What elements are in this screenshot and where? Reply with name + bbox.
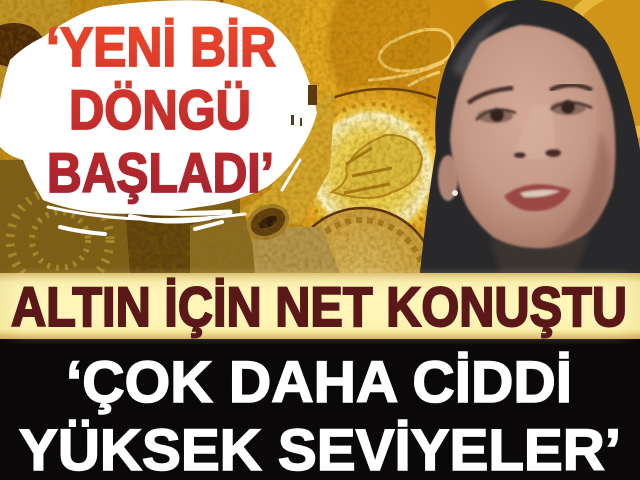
brush stroke details xyxy=(45,160,300,234)
photo background: gold coins xyxy=(0,0,640,273)
mouth xyxy=(504,184,571,211)
nose xyxy=(514,105,561,159)
left eyebrow xyxy=(468,88,513,103)
coin: dark ornate coin, lower left xyxy=(0,160,240,273)
coin: top centre fragment xyxy=(220,0,308,64)
white brush blob xyxy=(0,0,317,234)
hair shine xyxy=(452,15,504,78)
face xyxy=(450,25,616,248)
gold wedge right of blob xyxy=(235,90,335,225)
brush rough marks xyxy=(291,85,317,126)
right eyebrow xyxy=(550,85,592,90)
headline inside blob xyxy=(46,15,276,204)
gold ring xyxy=(246,204,290,240)
neck shadow xyxy=(490,235,590,273)
coin: lower ornate coin xyxy=(310,206,424,273)
coin: large portrait coin at top xyxy=(300,0,516,104)
quote line 1: ‘ÇOK DAHA CİDDİ xyxy=(66,350,572,415)
ear xyxy=(438,155,458,201)
black lower panel xyxy=(0,339,640,480)
coin: dark band centre bottom xyxy=(190,215,260,273)
shadow under cheek xyxy=(554,134,610,248)
headline line 3: BAŞLADI’ xyxy=(47,141,274,204)
earring xyxy=(452,190,458,196)
headline line 1: ‘YENİ BİR xyxy=(46,15,276,78)
hair xyxy=(420,0,640,273)
coin: top left dark gold xyxy=(0,0,70,90)
woman portrait xyxy=(420,0,640,273)
coin surface grain xyxy=(0,0,430,273)
headline line 2: DÖNGÜ xyxy=(69,78,251,141)
left eye xyxy=(476,108,516,123)
right eye xyxy=(550,100,592,115)
coin: pale coin near ring xyxy=(252,226,340,273)
white quote headline xyxy=(19,350,621,480)
coin: bright portrait coin xyxy=(302,85,436,238)
coin: top right xyxy=(572,0,640,138)
yellow headline band xyxy=(0,273,640,339)
